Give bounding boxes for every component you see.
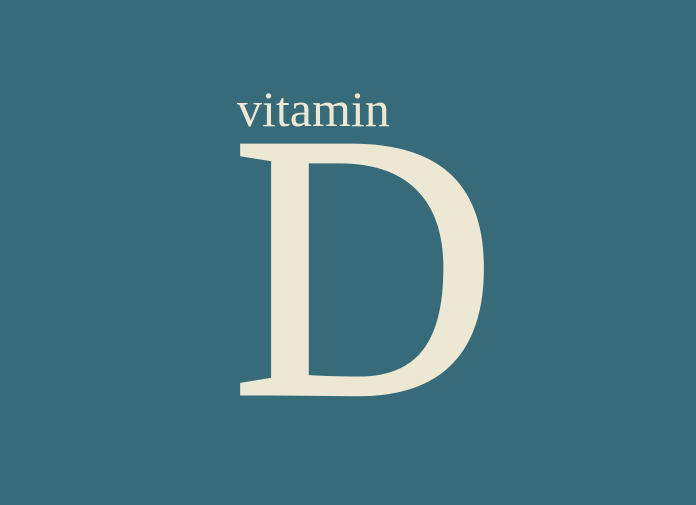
- title: big letter D: D: [231, 56, 497, 477]
- title: vitamin: vitamin: [237, 81, 390, 137]
